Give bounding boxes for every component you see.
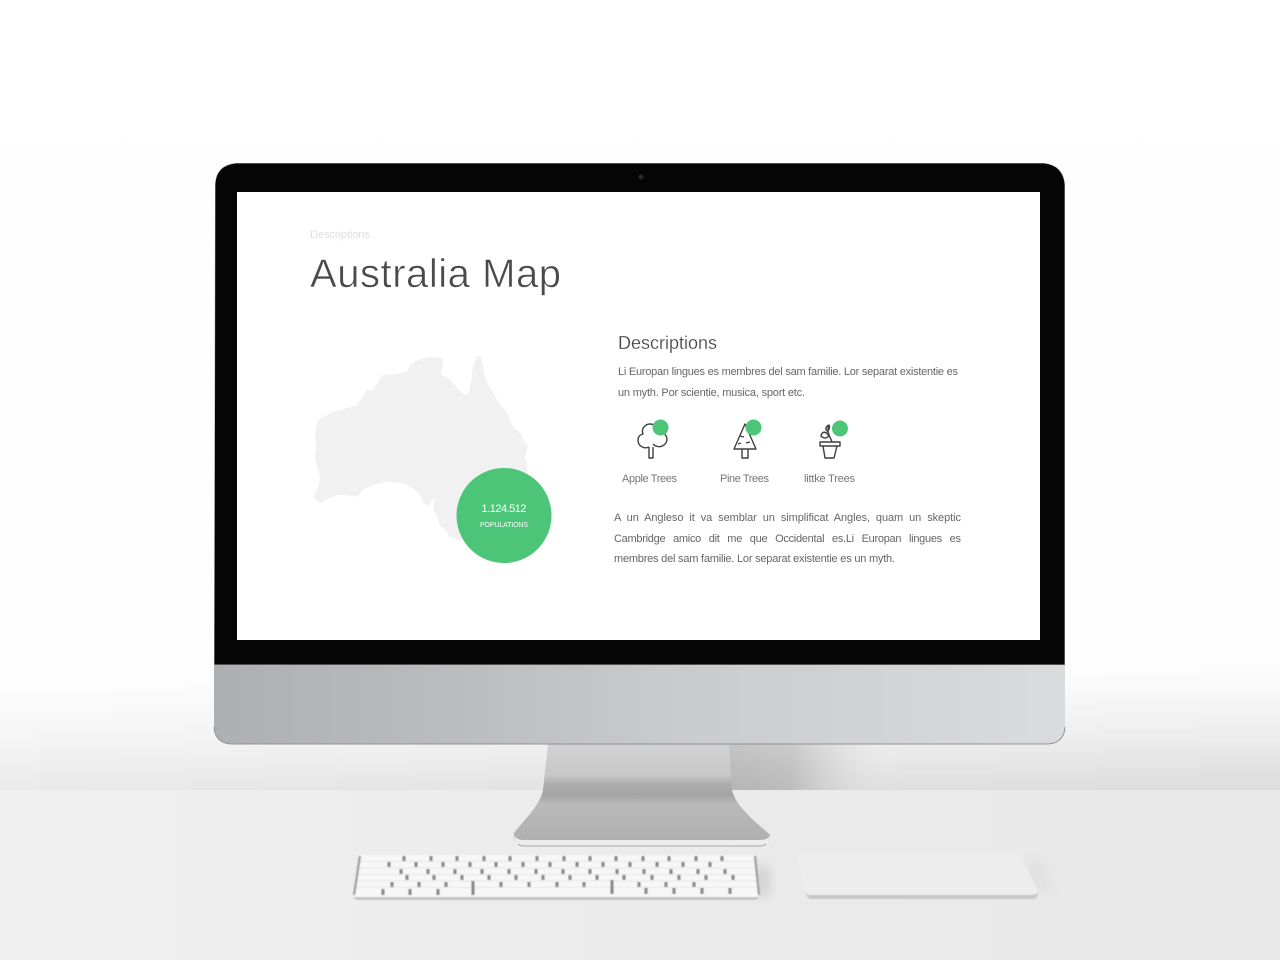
keyboard body [353,855,759,899]
trackpad shadow [1022,862,1052,893]
icon label: little trees: littke Trees [804,473,856,485]
monitor [214,163,1065,744]
icon: pine tree [734,420,762,458]
trackpad edge [805,891,1038,899]
webcam [638,174,644,180]
icon label: pine trees: Pine Trees [720,473,770,485]
title: Australia Map [310,252,561,296]
keyboard base edge [353,895,759,900]
keyboard key gaps [383,856,733,895]
icon: apple tree [638,420,668,458]
keyboard row lines [354,862,758,888]
chin bottom edge [214,727,1065,744]
description paragraph [618,366,958,399]
icon label: apple trees: Apple Trees [622,473,678,485]
trackpad [797,853,1038,899]
icon badge [652,420,668,436]
monitor chin [214,665,1065,744]
icon: potted plant [820,420,848,458]
lower paragraph: membres del sam familie. Lor separat existentie es un myth. [614,553,895,565]
population circle [456,468,552,563]
lower paragraph: Cambridge amico dit me que Occidental es.Li Europan lingues es [614,533,962,545]
slide screen [237,192,1040,640]
map of Australia [313,355,528,540]
keyboard [353,855,759,900]
lower paragraph [614,512,962,565]
monitor stand shadow [729,744,850,790]
icon badge [746,420,762,436]
small heading: Descriptions [310,229,370,241]
population label: POPULATIONS [480,522,528,529]
wall side shading [864,734,1280,790]
description heading: Descriptions [618,333,717,353]
keyboard shadow [755,866,769,896]
icon badge [832,420,848,436]
population number: 1.124.512 [482,503,526,515]
description paragraph: un myth. Por scientie, musica, sport etc. [618,387,805,399]
lower paragraph: A un Angleso it va semblar un simplificat Angles, quam un skeptic [614,512,962,524]
desk surface [0,790,1280,960]
description paragraph: Li Europan lingues es membres del sam familie. Lor separat existentie es [618,366,958,378]
monitor bezel [214,163,1065,665]
keyboard side edges [354,856,759,895]
monitor stand [514,744,770,846]
